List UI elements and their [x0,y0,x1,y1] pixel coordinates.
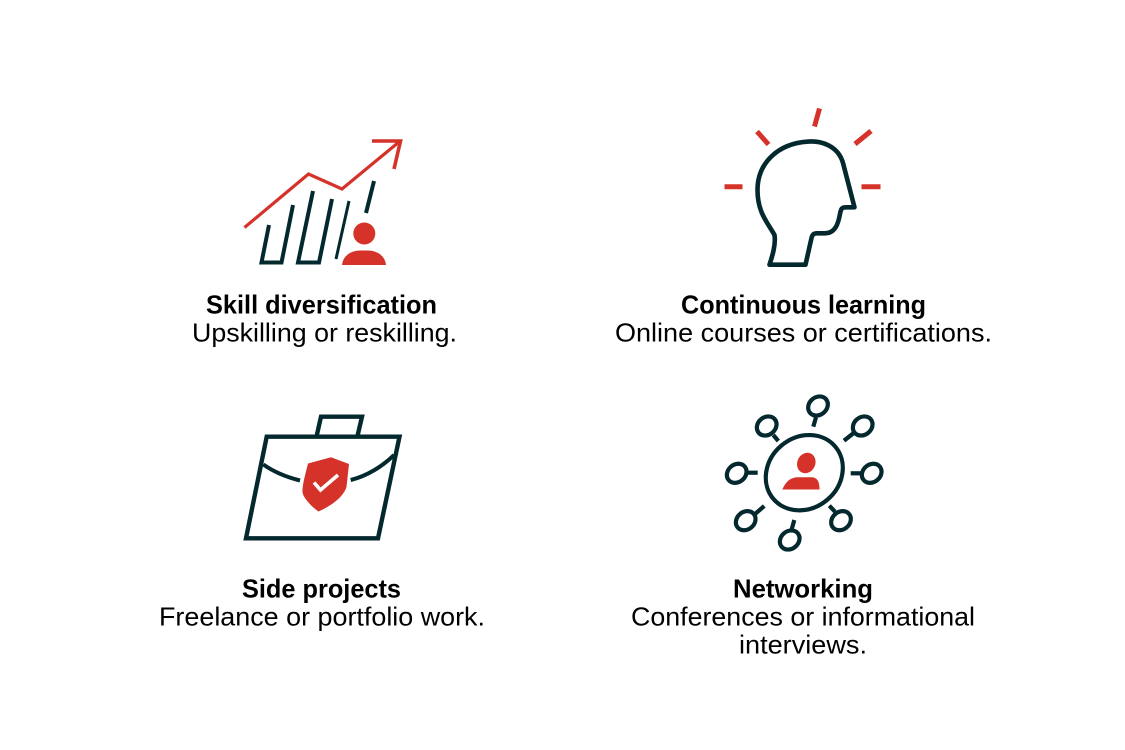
panel: networking [631,393,975,660]
panel: continuous learning [615,108,992,348]
heading: continuous learning: Continuous learning [681,290,926,320]
heading: networking: Networking [733,574,873,604]
icon: head with idea rays [724,108,880,265]
text: conferences or informational interviews: interviews. [739,630,867,660]
text: online courses or certifications: Online courses or certifications. [615,318,992,348]
heading: side projects: Side projects [242,574,401,604]
text: conferences or informational interviews [631,602,975,660]
text: conferences or informational interviews: Conferences or informational [631,602,975,632]
text: upskilling or reskilling: Upskilling or reskilling. [192,318,457,348]
panel: skill diversification [192,141,457,348]
icon: growth chart with person [244,141,400,265]
panel: side projects [159,417,485,632]
icon: network of contacts [723,393,885,553]
heading: skill diversification: Skill diversification [206,290,437,320]
icon: briefcase with shield [246,417,400,538]
text: freelance or portfolio work: Freelance or portfolio work. [159,602,485,632]
